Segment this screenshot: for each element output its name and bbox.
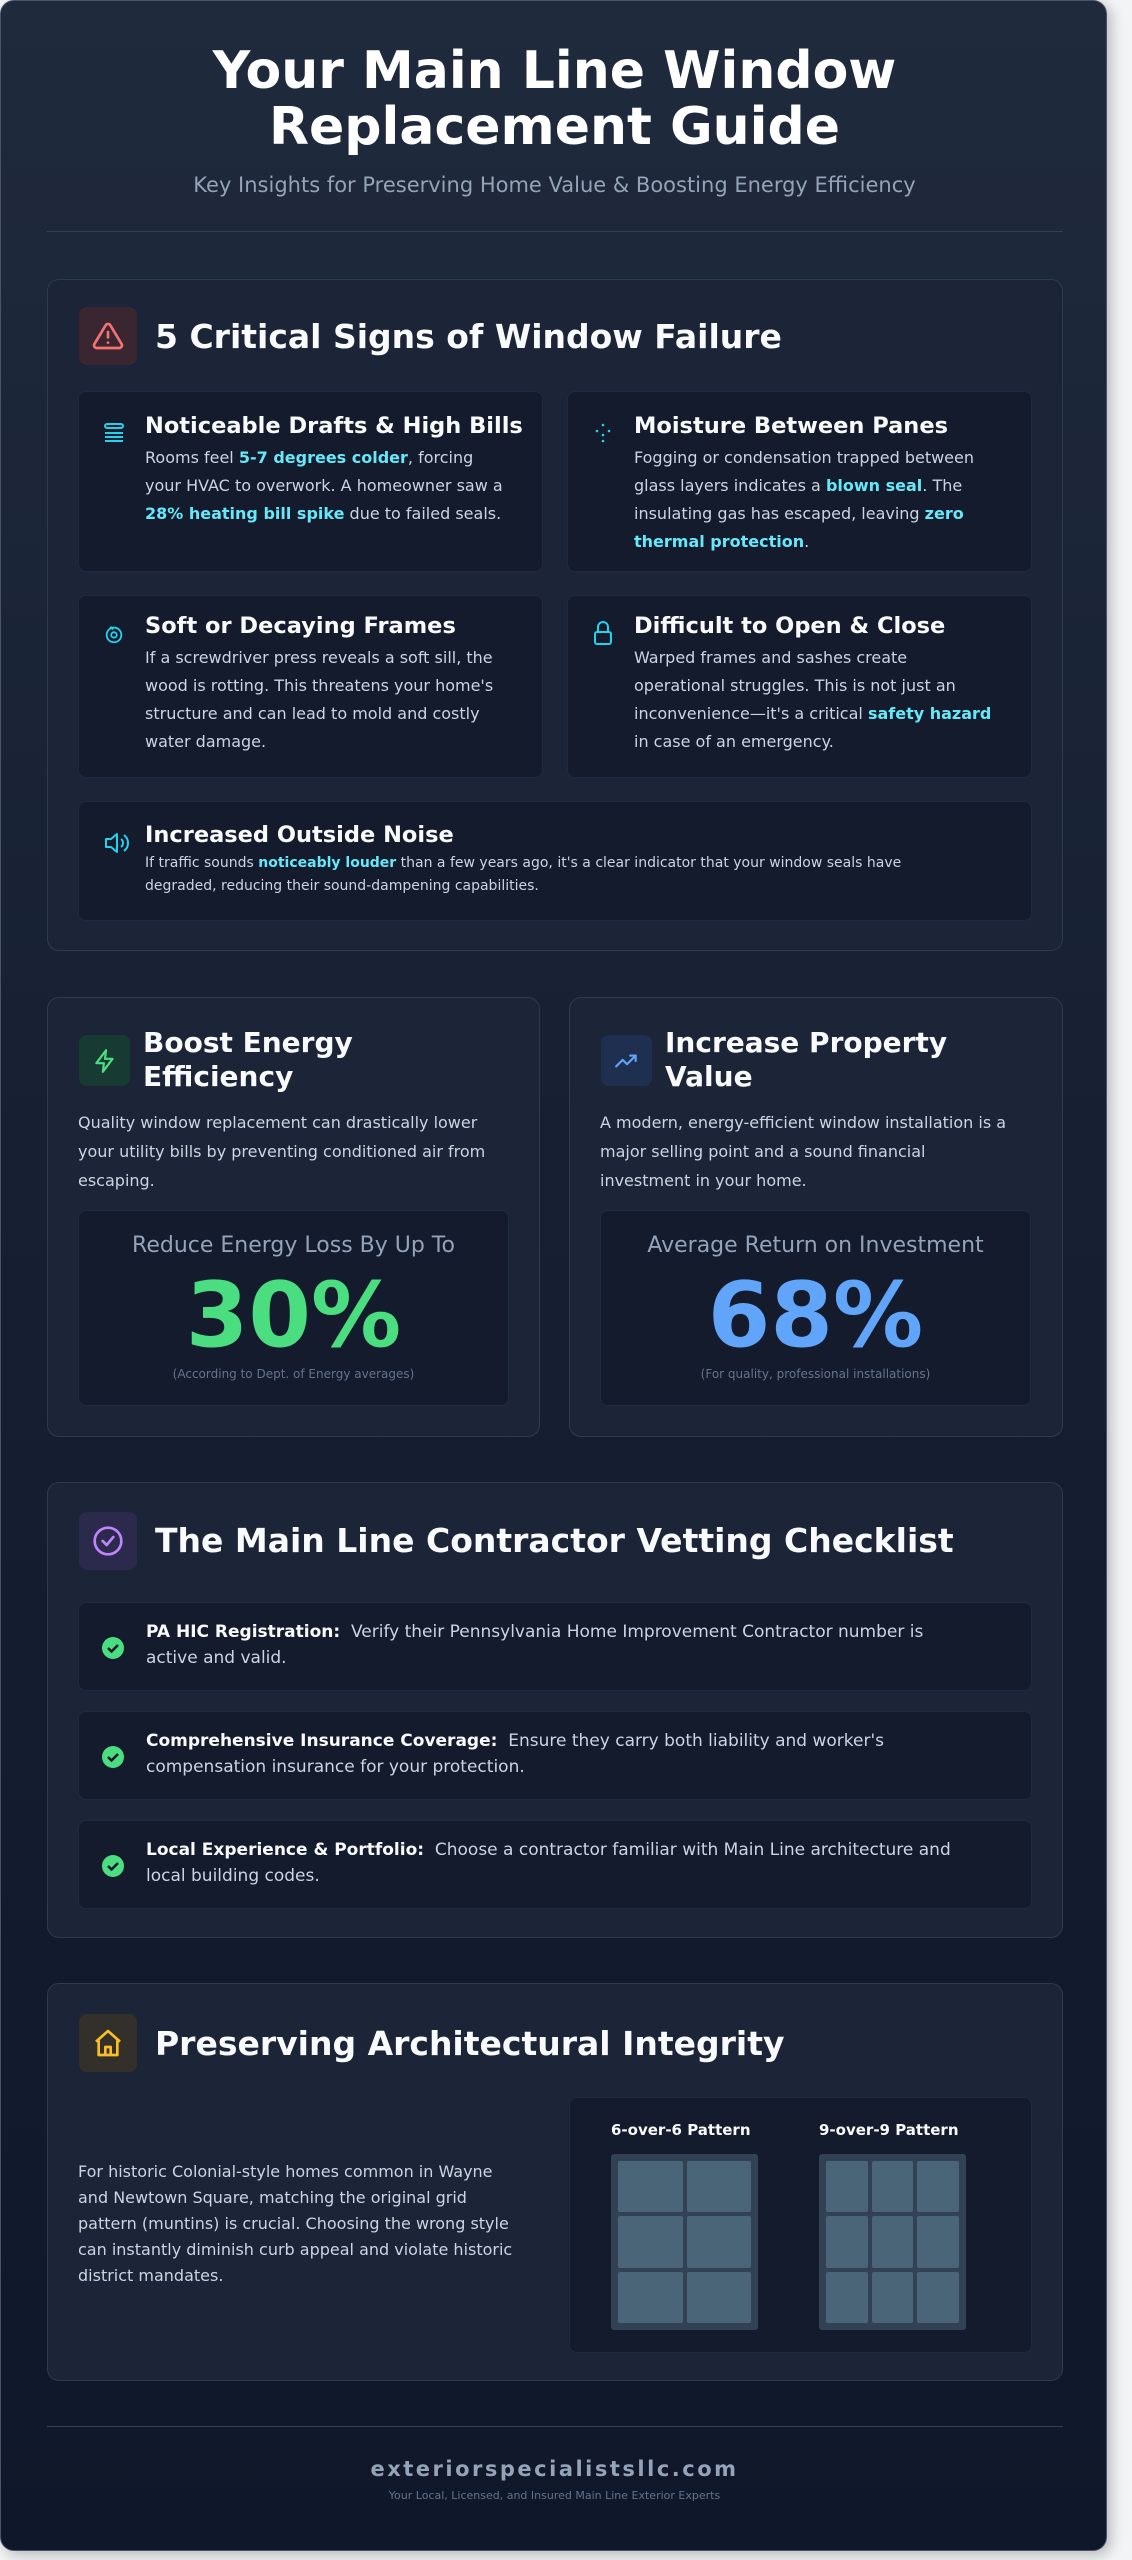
item: HIC: PA HIC Registration: Verify their Pennsylvania Home Improvement Contractor number is active and valid. [146, 1622, 923, 1668]
card: drafts: your HVAC to overwork. A homeowner saw a [145, 476, 503, 495]
card: difficult: in case of an emergency. [634, 732, 834, 751]
heading: Boost Energy [143, 1026, 353, 1059]
panel: energy efficiency [47, 997, 540, 1437]
panel: critical signs [47, 279, 1063, 951]
footer: exteriorspecialistsllc.com [370, 2457, 738, 2481]
icon: warning [79, 307, 137, 365]
card: frames: If a screwdriver press reveals a soft sill, the [145, 648, 493, 667]
card: frames: structure and can lead to mold and costly [145, 704, 480, 723]
text: district mandates. [78, 2266, 223, 2285]
icon: bolt [79, 1035, 130, 1086]
card: drafts: Rooms feel 5-7 degrees colder, forcing [145, 448, 473, 467]
card: moisture [567, 391, 1032, 572]
text: and Newtown Square, matching the original grid [78, 2188, 467, 2207]
item: local experience: Local Experience & Portfolio: Choose a contractor familiar with Main Line architecture and local building codes. [146, 1840, 951, 1886]
6-over-6 [611, 2121, 758, 2330]
grid pattern diagram [569, 2097, 1032, 2353]
stat: 30%: (According to Dept. of Energy averages) [173, 1367, 414, 1381]
heading: Preserving Architectural Integrity [155, 2024, 784, 2063]
card: frames [78, 595, 543, 778]
card: moisture: Fogging or condensation trapped between [634, 448, 974, 467]
stat: 30% [78, 1210, 509, 1406]
card: noise: degraded, reducing their sound-dampening capabilities. [145, 878, 539, 894]
6-over-6: 6-over-6 Pattern [611, 2121, 751, 2139]
icon: house [79, 2014, 137, 2072]
card: noise: Increased Outside Noise [145, 822, 454, 848]
heading: Efficiency [143, 1060, 293, 1093]
card: moisture: insulating gas has escaped, leaving zero [634, 504, 964, 523]
item: HIC [78, 1602, 1032, 1691]
heading: The Main Line Contractor Vetting Checklist [155, 1521, 954, 1560]
text [78, 1113, 485, 1190]
heading [665, 1026, 947, 1093]
card: noise [78, 801, 1032, 921]
footer [370, 2457, 738, 2502]
text: major selling point and a sound financial [600, 1142, 925, 1161]
card: frames: wood is rotting. This threatens your home's [145, 676, 493, 695]
card: frames: water damage. [145, 732, 266, 751]
subtitle: Key Insights for Preserving Home Value & Boosting Energy Efficiency [193, 173, 916, 197]
card: difficult: Warped frames and sashes create [634, 648, 907, 667]
heading: Value [665, 1060, 753, 1093]
stat: 30%: Reduce Energy Loss By Up To [132, 1233, 455, 1258]
card: moisture: Moisture Between Panes [634, 413, 948, 439]
stat: 68%: (For quality, professional installations) [701, 1367, 930, 1381]
stat: 68% [600, 1210, 1031, 1406]
title: Replacement Guide [269, 97, 840, 157]
card: difficult: operational struggles. This is not just an [634, 676, 956, 695]
panel: architectural integrity [47, 1983, 1063, 2381]
text [600, 1113, 1006, 1190]
panel: property value [569, 997, 1063, 1437]
card: difficult: inconvenience—it's a critical safety hazard [634, 704, 991, 723]
text: Quality window replacement can drastically lower [78, 1113, 477, 1132]
text [78, 2162, 512, 2285]
card: drafts [78, 391, 543, 572]
icon: trend [601, 1035, 652, 1086]
card: frames: Soft or Decaying Frames [145, 613, 456, 639]
footer: Your Local, Licensed, and Insured Main Line Exterior Experts [389, 2489, 720, 2502]
stat: 68%: Average Return on Investment [647, 1233, 984, 1258]
9-over-9: 9-over-9 Pattern [819, 2121, 959, 2139]
text: A modern, energy-efficient window installation is a [600, 1113, 1006, 1132]
title: Your Main Line Window [213, 41, 896, 101]
card: moisture: glass layers indicates a blown seal. The [634, 476, 962, 495]
text: escaping. [78, 1171, 155, 1190]
stat: 68%: 68% [708, 1263, 923, 1368]
9-over-9 [819, 2121, 966, 2330]
text: For historic Colonial-style homes common in Wayne [78, 2162, 493, 2181]
item: insurance [78, 1711, 1032, 1800]
item: insurance: Comprehensive Insurance Coverage: Ensure they carry both liability and worker's compensation insurance for your protection. [146, 1731, 884, 1777]
text: can instantly diminish curb appeal and violate historic [78, 2240, 512, 2259]
card: moisture: thermal protection. [634, 532, 809, 551]
panel: checklist [47, 1482, 1063, 1938]
heading [143, 1026, 353, 1093]
text: investment in your home. [600, 1171, 807, 1190]
card: noise: If traffic sounds noticeably louder than a few years ago, it's a clear indicator that your window seals have [145, 855, 901, 871]
stat: 30%: 30% [186, 1263, 401, 1368]
heading: Increase Property [665, 1026, 947, 1059]
card: drafts: Noticeable Drafts & High Bills [145, 413, 523, 439]
item: local experience [78, 1820, 1032, 1909]
title [212, 41, 896, 157]
icon: check circle [79, 1512, 137, 1570]
card: difficult [567, 595, 1032, 778]
text: your utility bills by preventing conditioned air from [78, 1142, 485, 1161]
heading: 5 Critical Signs of Window Failure [155, 317, 782, 356]
card: drafts: 28% heating bill spike due to failed seals. [145, 504, 501, 523]
card: difficult: Difficult to Open & Close [634, 613, 945, 639]
text: pattern (muntins) is crucial. Choosing the wrong style [78, 2214, 509, 2233]
